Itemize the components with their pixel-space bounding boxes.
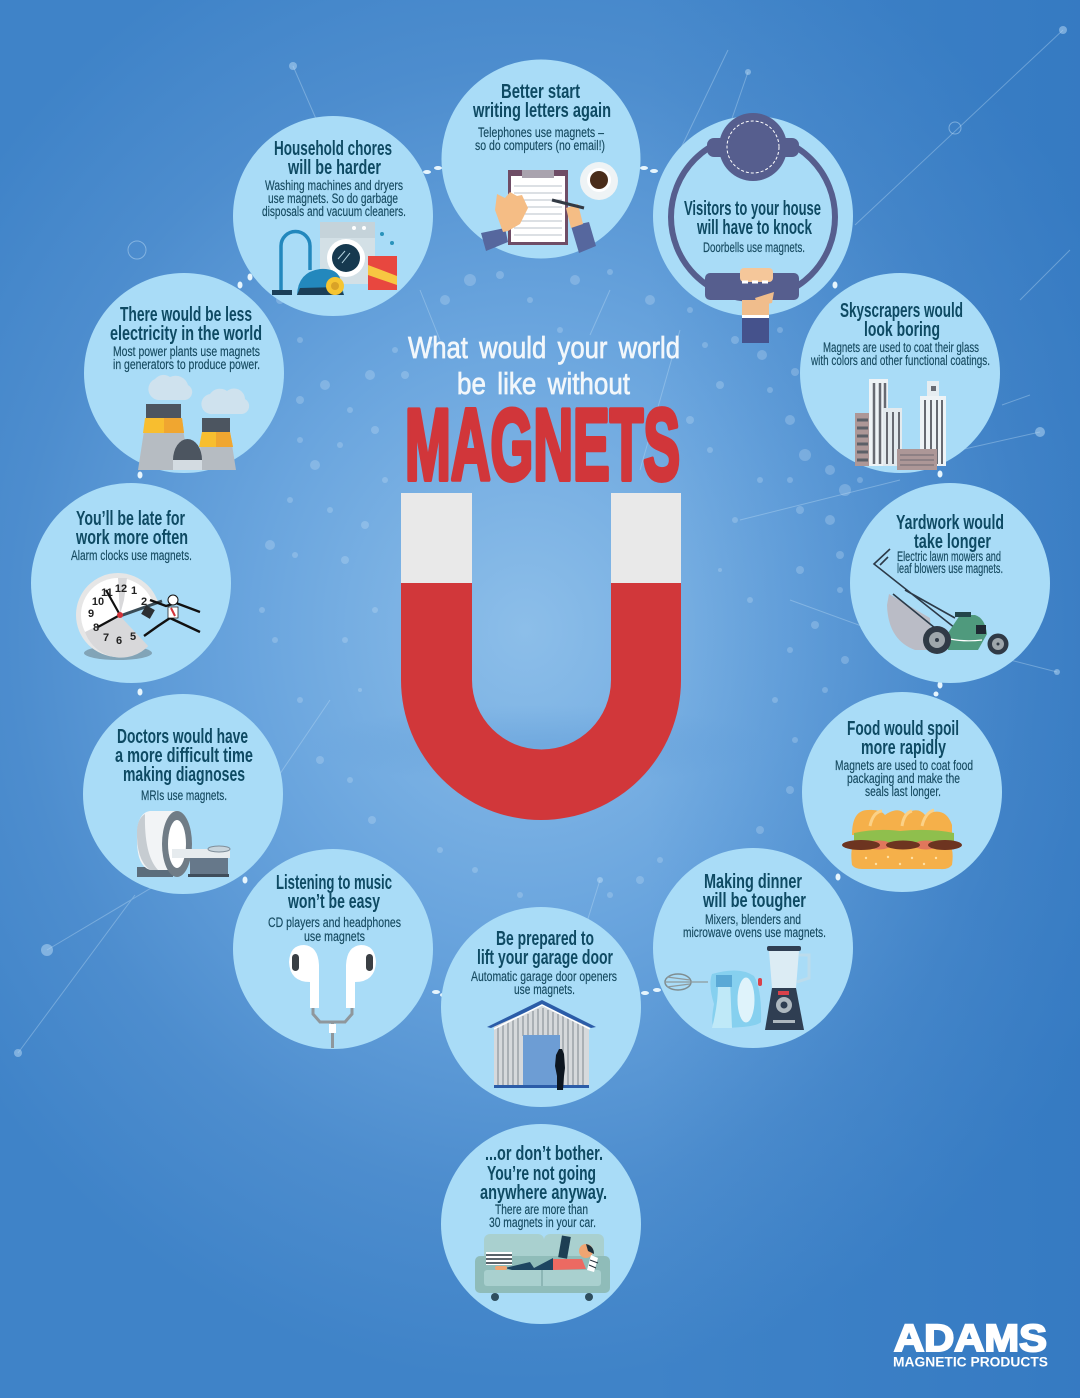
text: car magnets: There are more than [495,1202,588,1217]
text: food [835,758,973,799]
text: garage [471,969,617,997]
heading: doctors [115,726,253,786]
heading: music: won’t be easy [287,891,381,913]
icon: MRI scanner [137,811,230,877]
icon: person on couch [475,1234,610,1301]
text: food: seals last longer. [865,784,941,799]
icon: skyscrapers [855,379,946,470]
title: be like without [457,366,630,401]
text: garage: use magnets. [514,982,575,997]
text: appliances: microwave ovens use magnets. [683,925,826,940]
text: chores: disposals and vacuum cleaners. [262,204,406,219]
text: electricity: Most power plants use magnets [113,344,260,359]
heading: chores [274,138,392,179]
logo: Adams Magnetic Products: ADAMS [894,1318,1047,1360]
heading: don't bother [480,1143,607,1204]
icon: lawn mower [874,549,1008,654]
text: electricity: in generators to produce power. [113,357,260,372]
heading: skyscrapers: look boring [864,319,940,341]
heading: doctors: Doctors would have [117,726,248,748]
text: chores: use magnets. So do garbage [268,191,398,206]
heading: don't bother: You’re not going [487,1163,596,1185]
heading: garage: lift your garage door [477,947,613,969]
heading: MAGNETS: MAGNETS [405,390,680,502]
title: What would your world [408,330,680,365]
text: doorbell: Doorbells use magnets. [703,240,805,255]
heading: doorbell [684,198,821,239]
heading: electricity: There would be less [120,304,252,326]
heading: electricity [110,304,262,345]
heading: food [847,718,959,759]
icon: power plant [138,375,249,470]
heading: doorbell: will have to knock [696,217,813,239]
panel: telephones [442,60,640,258]
text: garage: Automatic garage door openers [471,969,617,984]
heading: garage: Be prepared to [496,928,594,950]
panel: garage door [441,907,641,1107]
icon: clock with running man: 9 [88,608,94,620]
panel: lawn mowers [850,483,1050,683]
icon: clock with running man [76,573,200,660]
text: MRI: MRIs use magnets. [141,788,227,803]
icon: clock with running man: 7 [103,632,109,644]
icon: washer, vacuum and detergent [272,222,397,295]
heading: don't bother: ...or don’t bother. [485,1143,603,1165]
heading: garage [477,928,613,969]
text: electricity [113,344,260,372]
text: telephones: so do computers (no email!) [475,138,605,153]
icon: door knocker [671,113,835,343]
heading: chores: Household chores [274,138,392,160]
text: food: packaging and make the [847,771,960,786]
text: mowers: Electric lawn mowers and [897,549,1001,564]
horseshoe magnet [401,493,681,820]
heading: late [75,508,188,549]
heading: letters: writing letters again [472,100,611,122]
icon: clock with running man: 1 [131,585,137,597]
panel: skyscrapers [800,273,1000,473]
text: headphones [268,915,401,944]
heading: doctors: making diagnoses [123,764,245,786]
panel: doorbell [653,113,853,343]
heading: yardwork: Yardwork would [896,512,1004,534]
icon: clock with running man: 12 [115,583,127,595]
text: chores [262,178,406,219]
text: skyscrapers: Magnets are used to coat their glass [823,340,979,355]
text: appliances [683,912,826,940]
text: skyscrapers [810,340,990,368]
heading: late: work more often [75,527,188,549]
text: telephones: Telephones use magnets – [478,125,604,140]
icon: clock with running man: 5 [130,631,136,643]
icon: earbuds [289,945,376,1048]
icon: clock with running man: 11 [101,587,113,599]
heading: doorbell: Visitors to your house [684,198,821,220]
heading: don't bother: anywhere anyway. [480,1182,607,1204]
heading: electricity: electricity in the world [110,323,262,345]
heading: letters: Better start [501,81,580,103]
heading: dinner [702,871,806,912]
icon: mixer and blender [665,946,809,1030]
title [408,330,680,401]
heading: food: Food would spoil [847,718,959,740]
panel: MRI [83,694,283,894]
heading: yardwork: take longer [914,531,991,553]
heading: dinner: will be tougher [702,890,806,912]
heading: letters [472,81,611,122]
text: mowers [897,549,1003,576]
text: car magnets [489,1202,596,1230]
panel: kitchen appliances [653,848,853,1048]
heading: dinner: Making dinner [704,871,802,893]
icon: clipboard and coffee [481,162,618,253]
logo: Adams Magnetic Products: MAGNETIC PRODUCTS [893,1354,1048,1370]
icon: clock with running man: 8 [93,622,99,634]
text: chores: Washing machines and dryers [265,178,403,193]
text: skyscrapers: with colors and other functional coatings. [810,353,990,368]
heading: late: You’ll be late for [76,508,185,530]
panel: electricity [84,273,284,473]
text: clocks: Alarm clocks use magnets. [71,548,192,563]
heading: food: more rapidly [861,737,947,759]
panel: headphones [233,849,433,1049]
text: car magnets: 30 magnets in your car. [489,1215,596,1230]
text: food: Magnets are used to coat food [835,758,973,773]
icon: sandwich [842,810,962,869]
heading: skyscrapers [840,300,963,341]
icon: clock with running man: 2 [141,596,147,608]
text: appliances: Mixers, blenders and [705,912,801,927]
connector dashes between circles [138,166,942,997]
heading: yardwork [896,512,1004,553]
text: headphones: CD players and headphones [268,915,401,930]
icon: garage with figure [487,1000,596,1090]
panel: household chores [233,116,433,316]
text: headphones: use magnets [304,929,365,944]
text: telephones [475,125,605,153]
panel: car magnets [441,1124,641,1324]
heading: chores: will be harder [287,157,381,179]
icon: clock with running man: 6 [116,635,122,647]
icon: clock with running man: 10 [92,596,104,608]
text: mowers: leaf blowers use magnets. [897,561,1003,576]
heading: skyscrapers: Skyscrapers would [840,300,963,322]
panel: food packaging [802,692,1002,892]
panel: alarm clocks [31,483,231,683]
heading: music [276,872,392,913]
heading: doctors: a more difficult time [115,745,253,767]
heading: music: Listening to music [276,872,392,894]
